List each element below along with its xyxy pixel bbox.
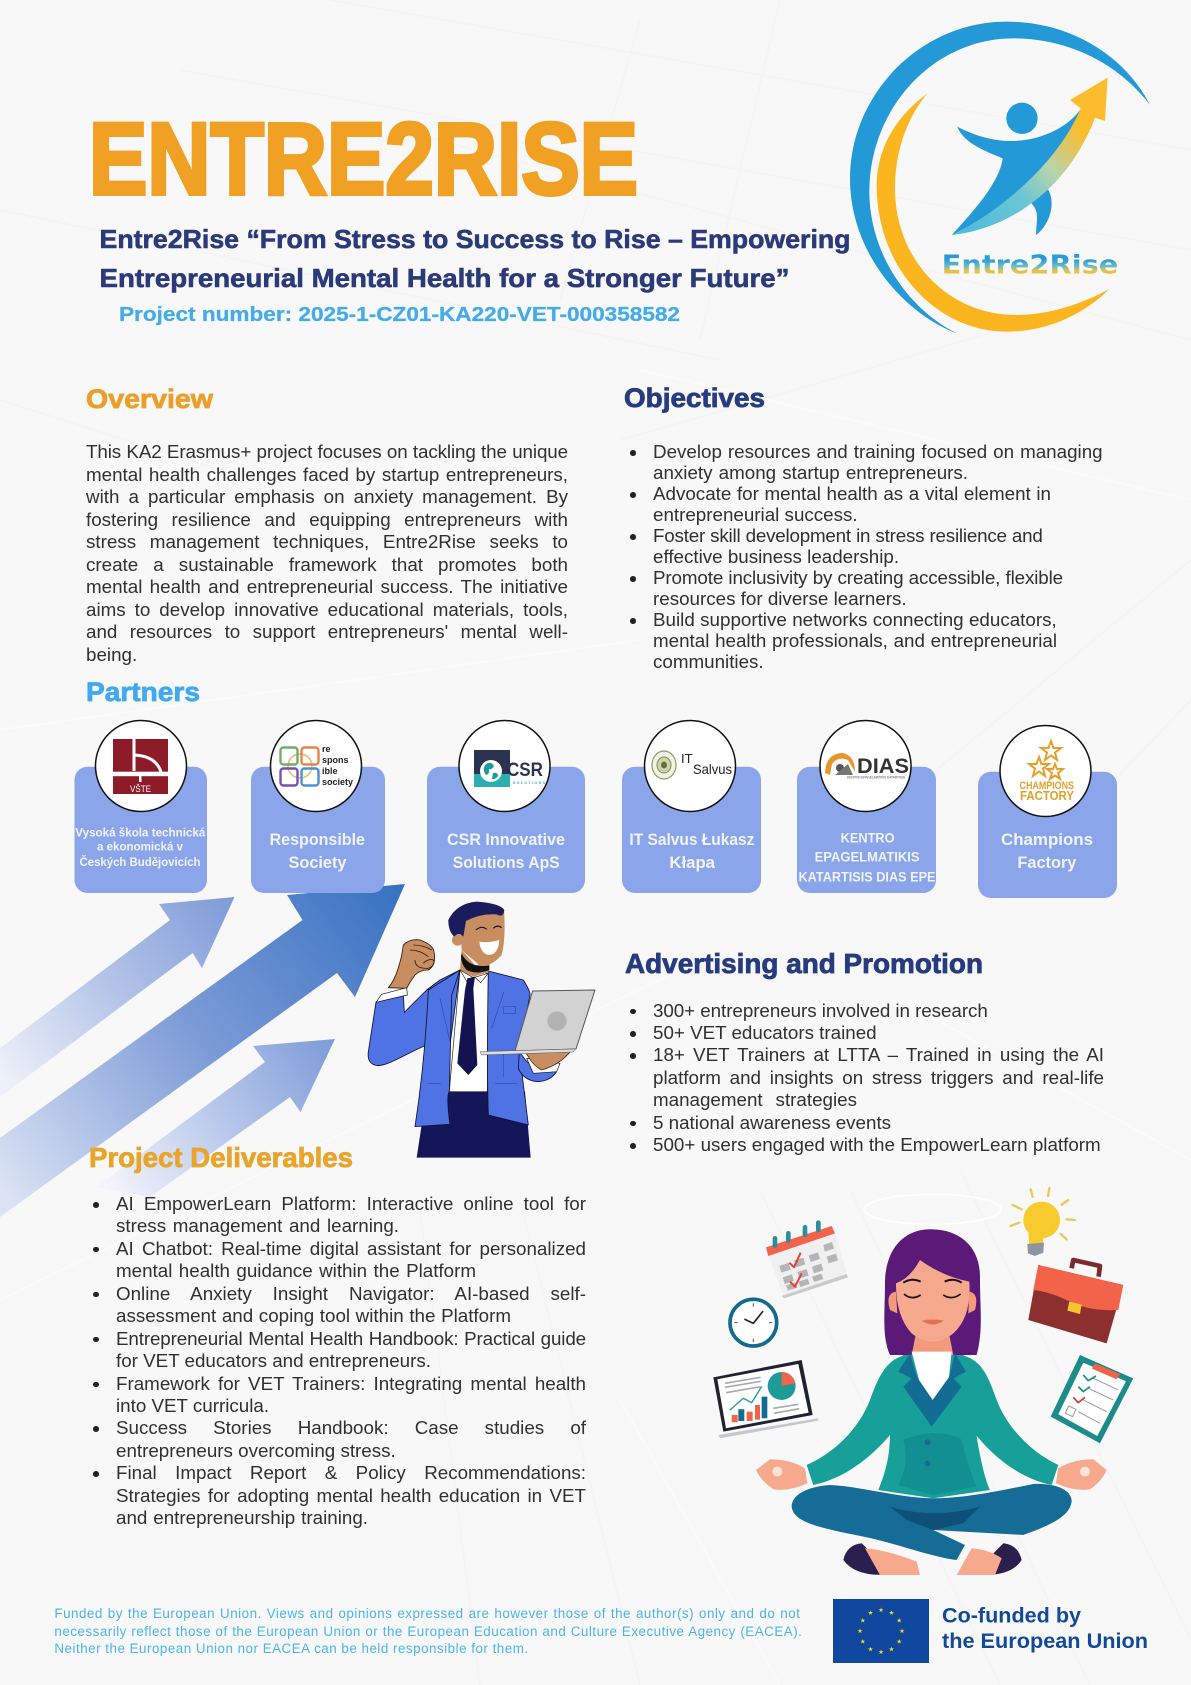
list: project deliverables: Final Impact Report & Policy Recommendations:: [116, 1462, 586, 1483]
list: objectives: communities.: [653, 651, 764, 672]
logo wordmark: Entre2Rise: [942, 250, 1118, 280]
partner logo: [270, 720, 362, 812]
partner name: Society: [288, 853, 347, 872]
footer disclaimer: [54, 1606, 802, 1656]
partner name: [75, 826, 206, 869]
partner logo: FACTORY: [1020, 788, 1074, 803]
partner logo: DIAS: [857, 755, 909, 778]
legs: [792, 1484, 1072, 1560]
list: objectives: mental health professionals, and entrepreneurial: [653, 630, 1057, 651]
shirt collar: [912, 1352, 952, 1427]
partner logo: spons: [322, 755, 349, 765]
hand: [526, 1050, 572, 1070]
partner name: IT Salvus Łukasz: [629, 830, 754, 849]
mouth: [922, 1319, 944, 1324]
jacket buttons: [925, 1439, 931, 1445]
shirt: [449, 970, 488, 1092]
trousers: [417, 1092, 531, 1158]
arrow: lower rising arrow: [96, 1039, 335, 1197]
list: project deliverables: Entrepreneurial Mental Health Handbook: Practical guide: [116, 1328, 586, 1349]
text block: overview: aims to develop innovative educational materials, tools,: [86, 599, 568, 620]
closed eyes and brows: [904, 1294, 961, 1298]
text block: overview: fostering resilience and equipping entrepreneurs with: [86, 509, 568, 530]
lapels: [898, 1353, 966, 1427]
jacket shading: [898, 1433, 977, 1495]
text block: overview: stress management techniques, Entre2Rise seeks to: [86, 531, 568, 552]
partner logo: [820, 720, 911, 812]
partner card: [797, 767, 936, 893]
text block: overview: mental health challenges faced by startup entrepreneurs,: [86, 464, 568, 485]
list: objectives: [630, 441, 1103, 672]
hair: [884, 1229, 981, 1355]
partner: DIAS: [797, 720, 936, 893]
logo gold crescent: [877, 93, 1109, 332]
list: advertising and promotion: 18+ VET Trainers at LTTA – Trained in using the AI: [653, 1044, 1104, 1065]
partner: Responsible Society: [251, 720, 385, 893]
jacket: [878, 1355, 990, 1498]
list: advertising and promotion: 300+ entrepreneurs involved in research: [653, 1000, 988, 1021]
partner card: [251, 767, 385, 893]
EU flag: [833, 1599, 929, 1663]
heading: Overview: Overview: [86, 384, 214, 414]
partner name: [798, 831, 936, 885]
right cuff: [527, 1058, 560, 1073]
partner logo: society: [322, 777, 353, 787]
list: advertising and promotion: 500+ users engaged with the EmpowerLearn platform: [653, 1134, 1101, 1155]
logo blue crescent: [850, 22, 1150, 333]
cuff: [376, 988, 407, 1002]
heading: Objectives: Objectives: [624, 383, 765, 413]
heading: Advertising and Promotion: Advertising and Promotion: [625, 948, 983, 979]
icon: clock: [730, 1299, 777, 1346]
text block: overview: mental health and entrepreneurial success. The initiative: [86, 576, 568, 597]
jacket left panel: [415, 970, 460, 1127]
text block: overview: and resources to support entrepreneurs' mental well-: [86, 621, 568, 642]
smile: [479, 940, 499, 955]
list: advertising and promotion: 50+ VET educators trained: [653, 1022, 877, 1043]
list: objectives: Advocate for mental health as a vital element in: [653, 483, 1051, 504]
jacket right panel: [487, 971, 530, 1125]
list: objectives: effective business leadership.: [653, 546, 899, 567]
right arm: [960, 1355, 1058, 1485]
list: objectives: Develop resources and training focused on managing: [653, 441, 1103, 462]
list: objectives: Build supportive networks connecting educators,: [653, 609, 1057, 630]
neck: [912, 1330, 953, 1383]
partner name: CSR Innovative: [447, 830, 565, 849]
tie: [457, 977, 477, 1075]
partner: Champions Factory: [978, 726, 1117, 898]
right hand: [1056, 1459, 1107, 1490]
list: objectives: Foster skill development in stress resilience and: [653, 525, 1043, 546]
logo rising figure: [952, 103, 1080, 235]
text block: overview: [86, 441, 568, 665]
partner logo: CHAMPIONS: [1020, 780, 1074, 792]
neck: [460, 950, 490, 977]
partner logo: [459, 720, 550, 812]
collar: [460, 970, 488, 983]
icon: light bulb: [1011, 1188, 1075, 1256]
list: project deliverables: Strategies for adopting mental health education in VET: [116, 1485, 586, 1506]
partner: VSTE: [74, 720, 207, 893]
partner name: EPAGELMATIKIS: [815, 850, 920, 865]
list: objectives: resources for diverse learners.: [653, 588, 907, 609]
legs shadow: [890, 1507, 980, 1530]
arrow: upper rising arrow: [0, 897, 234, 1097]
partner name: Solutions ApS: [453, 853, 560, 872]
partner name: Vysoká škola technická: [75, 826, 206, 840]
text block: overview: create a sustainable framework that promotes both: [86, 554, 568, 575]
partner logo: INNOVATIVE SOLUTIONS: [475, 781, 546, 785]
list: objectives: entrepreneurial success.: [653, 504, 858, 525]
footer disclaimer: necessarily reflect those of the European Union or the European Education and Culture Executive Agency (EACEA).: [54, 1624, 802, 1639]
partner logo: IT: [681, 751, 693, 766]
icon: briefcase: [1028, 1260, 1123, 1343]
title: ENTRE2RISE: [89, 102, 638, 216]
ear: [452, 934, 463, 946]
partner logo: CSR: [507, 760, 543, 781]
partner name: [270, 830, 365, 872]
icon: calendar: [766, 1223, 848, 1298]
partner: CSR Innovative Solutions: [427, 720, 585, 893]
hair: [448, 902, 504, 937]
co-funded label: Co-funded by: [942, 1604, 1081, 1628]
partner logo: re: [322, 744, 331, 754]
jacket details: [428, 992, 517, 1083]
list: project deliverables: stress management and learning.: [116, 1215, 399, 1236]
laptop logo: [547, 1011, 567, 1031]
partner logo: [644, 720, 736, 812]
laptop base: [480, 1049, 575, 1055]
list: project deliverables: Framework for VET Trainers: Integrating mental health: [116, 1372, 586, 1394]
partner card: [427, 767, 585, 893]
beard: [461, 953, 489, 972]
footer disclaimer: Neither the European Union nor EACEA can be held responsible for them.: [54, 1641, 529, 1656]
list: project deliverables: mental health guidance within the Platform: [116, 1260, 476, 1281]
footer disclaimer: Funded by the European Union. Views and opinions expressed are however those of the author(s) only and do not: [54, 1606, 800, 1621]
text block: overview: This KA2 Erasmus+ project focuses on tackling the unique: [86, 441, 568, 462]
list: project deliverables: and entrepreneurship training.: [116, 1507, 368, 1528]
subtitle: Entrepreneurial Mental Health for a Stronger Future”: [100, 263, 790, 293]
partner logo: [1000, 726, 1091, 816]
closed eyes: [476, 926, 502, 930]
logo: Entre2Rise: [850, 22, 1150, 333]
list: project deliverables: Online Anxiety Insight Navigator: AI-based self-: [116, 1283, 586, 1304]
list: project deliverables: into VET curricula.: [116, 1395, 269, 1416]
subtitle: [100, 224, 850, 293]
partner logo: KENTRO EPAGELMATIKIS KATARTISIS: [847, 776, 906, 780]
partner name: Kłapa: [669, 853, 716, 872]
fist and forearm: [388, 940, 435, 988]
partner: IT Salvus: [622, 720, 761, 893]
icon: laptop with charts: [713, 1360, 818, 1438]
partner logo: VŠTE: [130, 784, 151, 795]
text block: overview: being.: [86, 644, 137, 665]
list: objectives: Promote inclusivity by creating accessible, flexible: [653, 567, 1063, 588]
raised arm sleeve: [368, 970, 460, 1066]
shoes: [843, 1543, 1022, 1575]
list: project deliverables: entrepreneurs overcoming stress.: [116, 1440, 396, 1461]
list: project deliverables: assessment and coping tool within the Platform: [116, 1305, 511, 1326]
list: objectives: anxiety among startup entrepreneurs.: [653, 462, 968, 483]
partner name: Českých Budějovicích: [80, 854, 200, 869]
illustration: businessman with laptop: [368, 902, 595, 1158]
partner logo: [96, 720, 186, 812]
face: [460, 910, 505, 966]
list: advertising and promotion: platform and insights on stress triggers and real-life: [653, 1067, 1104, 1088]
illustration: meditating businesswoman: [713, 1188, 1133, 1575]
partner logo: ible: [322, 766, 338, 776]
partner logo: Salvus: [693, 761, 732, 777]
ears: [888, 1292, 976, 1313]
heading: Partners: Partners: [86, 677, 200, 707]
partner name: a ekonomická v: [97, 840, 183, 854]
list: advertising and promotion: 5 national awareness events: [653, 1112, 891, 1133]
list: advertising and promotion: [630, 1000, 1104, 1155]
partner name: KATARTISIS DIAS EPE: [798, 870, 936, 885]
list: project deliverables: AI Chatbot: Real-time digital assistant for personalized: [116, 1238, 586, 1259]
list: advertising and promotion: management strategies: [653, 1089, 857, 1110]
partner name: KENTRO: [841, 831, 895, 846]
partner card: [622, 767, 761, 893]
subtitle: Entre2Rise “From Stress to Success to Rise – Empowering: [100, 224, 850, 254]
laptop screen: [515, 990, 595, 1051]
partner name: [629, 830, 754, 872]
left arm: [807, 1355, 907, 1485]
list: project deliverables: AI EmpowerLearn Platform: Interactive online tool for: [116, 1193, 586, 1214]
face: [896, 1260, 970, 1342]
text block: overview: with a particular emphasis on anxiety management. By: [86, 486, 568, 507]
feet: [865, 1548, 1002, 1575]
list: project deliverables: for VET educators and entrepreneurs.: [116, 1350, 431, 1371]
list: project deliverables: [93, 1193, 586, 1528]
list: project deliverables: Success Stories Handbook: Case studies of: [116, 1417, 586, 1438]
right sleeve: [518, 1052, 557, 1082]
partner name: Responsible: [270, 830, 365, 849]
logo arrow: [952, 78, 1108, 235]
partner name: [447, 830, 565, 872]
partner name: [1001, 830, 1093, 872]
halo: [864, 1194, 1001, 1224]
project number: Project number: 2025-1-CZ01-KA220-VET-000358582: [119, 304, 680, 326]
partner name: Champions: [1001, 830, 1093, 849]
icon: clipboard checklist: [1051, 1355, 1133, 1443]
partner card: [978, 772, 1117, 898]
arrow: large rising arrow: [0, 884, 405, 1217]
left hand: [756, 1459, 807, 1490]
heading: Project Deliverables: Project Deliverables: [89, 1142, 353, 1173]
partner name: Factory: [1017, 853, 1077, 872]
co-funded label: [942, 1604, 1148, 1653]
partner card: [74, 767, 207, 893]
co-funded label: the European Union: [942, 1629, 1148, 1653]
